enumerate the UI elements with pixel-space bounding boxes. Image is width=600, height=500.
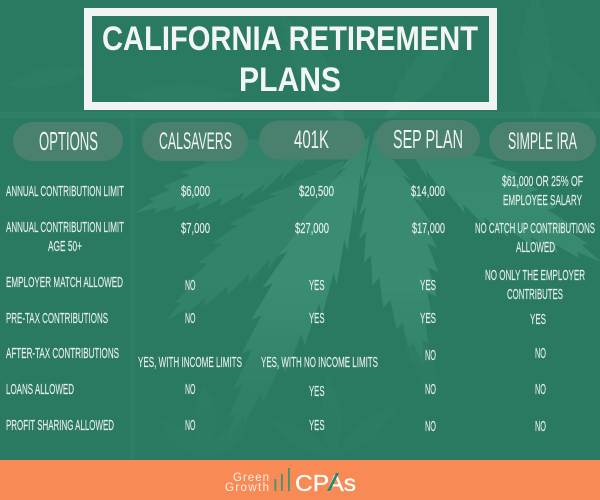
faint column band xyxy=(130,118,135,460)
row: pre-tax contributions: YES xyxy=(530,312,546,328)
row: loans allowed: NO xyxy=(425,382,436,398)
row: employer match allowed: YES xyxy=(420,278,436,294)
row: loans allowed: LOANS ALLOWED xyxy=(6,382,74,398)
header: sep plan xyxy=(375,120,480,159)
row: annual contribution limit: ANNUAL CONTRIBUTION LIMIT xyxy=(6,184,124,200)
row: pre-tax contributions: YES xyxy=(420,311,436,327)
logo: green growth cpas: Growth xyxy=(225,482,269,494)
row: employer match allowed: EMPLOYER MATCH ALLOWED xyxy=(6,275,123,291)
row: annual contribution limit age 50+: $17,000 xyxy=(412,221,445,237)
row: after-tax contributions: AFTER-TAX CONTRIBUTIONS xyxy=(6,346,119,362)
row: annual contribution limit age 50+ xyxy=(6,220,595,256)
row: annual contribution limit age 50+: AGE 50+ xyxy=(48,239,82,255)
row: annual contribution limit xyxy=(6,174,583,209)
header: calsavers xyxy=(142,122,248,161)
row: employer match allowed: NO xyxy=(185,278,196,294)
row: loans allowed: YES xyxy=(309,384,324,400)
row: profit sharing allowed: YES xyxy=(309,418,324,434)
row: profit sharing allowed: NO xyxy=(185,418,196,434)
row: after-tax contributions: NO xyxy=(535,346,546,362)
row: loans allowed xyxy=(6,382,546,400)
row: employer match allowed xyxy=(6,268,585,303)
faint header band xyxy=(0,112,600,118)
row: after-tax contributions: YES, WITH INCOME LIMITS xyxy=(138,355,242,371)
row: profit sharing allowed: NO xyxy=(425,419,436,435)
row: profit sharing allowed: NO xyxy=(535,419,546,435)
row: after-tax contributions: NO xyxy=(425,348,436,364)
header: options: OPTIONS xyxy=(39,126,98,156)
footer band xyxy=(0,460,600,500)
row: annual contribution limit: $20,500 xyxy=(299,184,334,200)
row: profit sharing allowed: PROFIT SHARING ALLOWED xyxy=(6,418,114,434)
row: annual contribution limit age 50+: $27,000 xyxy=(295,221,329,237)
row: annual contribution limit age 50+: ANNUAL CONTRIBUTION LIMIT xyxy=(6,220,124,236)
header: simple ira xyxy=(489,122,596,161)
header: sep plan: SEP PLAN xyxy=(393,124,463,154)
row: annual contribution limit: $14,000 xyxy=(411,184,445,200)
row: loans allowed: NO xyxy=(185,382,196,398)
header: options xyxy=(13,122,123,161)
logo: green growth cpas: CPAs xyxy=(295,470,356,496)
header: 401k: 401K xyxy=(294,126,329,154)
row: annual contribution limit age 50+: ALLOWED xyxy=(516,240,555,256)
row: loans allowed: NO xyxy=(535,382,546,398)
row: employer match allowed: YES xyxy=(309,278,324,294)
logo: green growth cpas xyxy=(225,468,356,496)
row: pre-tax contributions: PRE-TAX CONTRIBUTIONS xyxy=(6,311,108,327)
row: pre-tax contributions: NO xyxy=(185,311,196,327)
row: profit sharing allowed xyxy=(6,418,546,435)
row: after-tax contributions xyxy=(6,346,546,371)
row: pre-tax contributions: YES xyxy=(309,311,324,327)
row: annual contribution limit age 50+: $7,000 xyxy=(181,221,210,237)
header: calsavers: CALSAVERS xyxy=(159,128,232,155)
row: pre-tax contributions xyxy=(6,311,546,328)
header: 401k xyxy=(259,120,365,160)
row: after-tax contributions: YES, WITH NO INCOME LIMITS xyxy=(261,355,378,371)
row: annual contribution limit: $6,000 xyxy=(181,184,210,200)
title: PLANS xyxy=(239,61,341,99)
title: CALIFORNIA RETIREMENT xyxy=(102,20,478,58)
logo: green growth cpas: Green xyxy=(233,472,269,484)
title xyxy=(88,12,493,106)
